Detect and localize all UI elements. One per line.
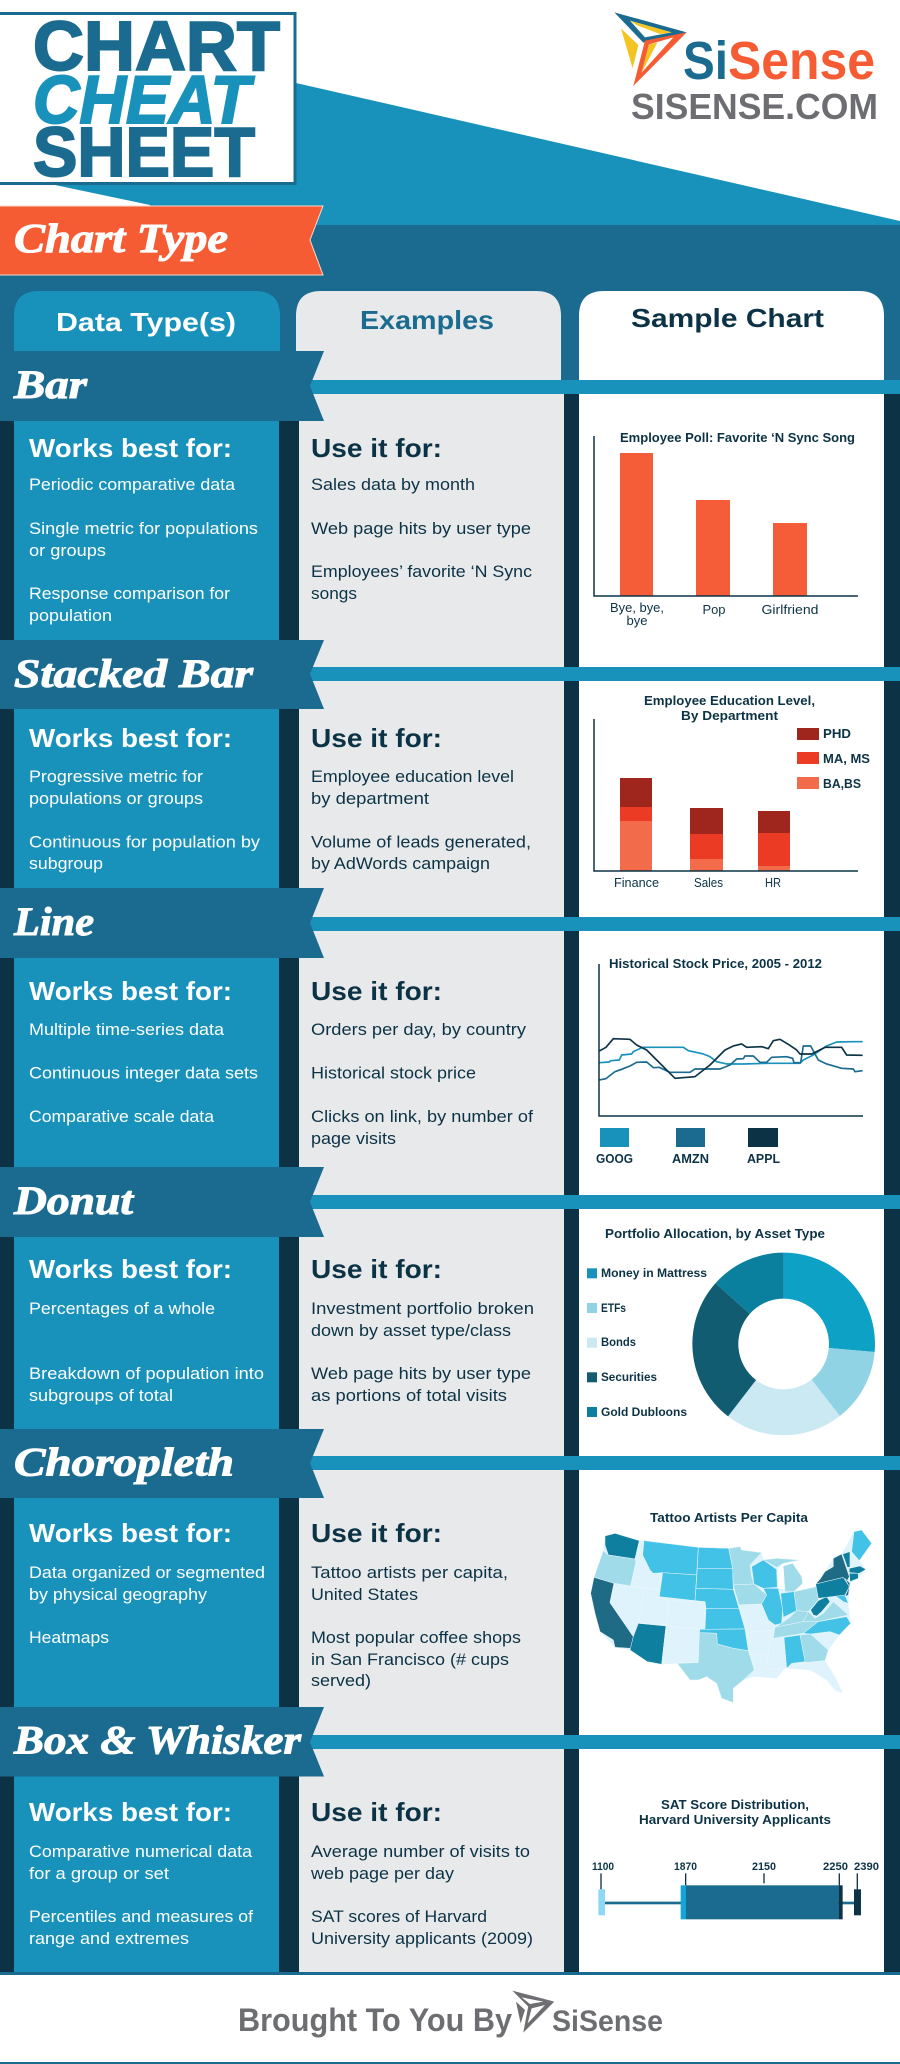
section: Bar <box>0 351 900 628</box>
text: bar use it for: Use it for: <box>311 433 442 463</box>
logo: SiSense: Si <box>683 31 728 91</box>
text: stacked bar use it for: Use it for: <box>311 723 442 753</box>
chart: box and whisker: 1100 <box>592 1861 614 1873</box>
chart: box and whisker: 2390 <box>854 1861 879 1873</box>
header band <box>0 225 900 381</box>
text: stacked bar works best for <box>29 723 261 873</box>
text: bar works best for <box>29 433 258 625</box>
chart: stacked bar: Employee Education Level, <box>644 694 815 708</box>
logo: SiSense: Sense <box>728 31 875 91</box>
ribbon: Donut: Donut <box>13 1178 135 1223</box>
text: stacked bar use it for: Employee education level <box>311 767 514 786</box>
ribbon: Choropleth <box>0 1429 324 1498</box>
text: choropleth use it for: in San Francisco (# cups <box>311 1650 509 1669</box>
text: stacked bar works best for: Progressive metric for <box>29 767 203 786</box>
chart: line: Historical Stock Price, 2005 - 2012 <box>609 957 822 971</box>
text: box works best for <box>29 1797 253 1948</box>
chart: bar: Pop <box>702 603 726 617</box>
title box: CHART <box>33 7 280 85</box>
text: stacked bar use it for: by department <box>311 789 429 808</box>
text: donut use it for: Use it for: <box>311 1254 442 1284</box>
text: box use it for <box>310 1797 533 1948</box>
ribbon: Line <box>0 888 324 958</box>
chart: box and whisker: 1870 <box>674 1861 697 1873</box>
text: bar use it for: Sales data by month <box>311 475 475 494</box>
chart: bar: bye <box>626 614 648 628</box>
text: stacked bar use it for: Volume of leads generated, <box>311 832 531 852</box>
panel: examples column <box>296 291 564 1972</box>
title box: CHEAT <box>33 62 255 138</box>
chart: donut: Securities <box>601 1370 657 1384</box>
chart: bar: Bye, bye, <box>610 601 664 615</box>
chart: bar: Girlfriend <box>762 603 819 617</box>
ribbon: Stacked Bar <box>0 640 324 709</box>
icon: SiSense mark <box>512 1991 554 2033</box>
header background wedge <box>55 83 900 226</box>
text: choropleth works best for <box>29 1518 265 1647</box>
text: box works best for: Comparative numerical data <box>29 1842 253 1861</box>
text: bar works best for: or groups <box>29 541 106 560</box>
chart: stacked bar: MA, MS <box>823 751 870 766</box>
text: donut use it for: Web page hits by user type <box>311 1364 531 1383</box>
text: bar works best for: Response comparison for <box>29 584 230 603</box>
chart: line: APPL <box>747 1151 780 1166</box>
text: choropleth works best for: Works best for: <box>29 1518 232 1548</box>
ribbon: Chart Type <box>0 206 323 275</box>
column heading: Examples: Examples <box>360 305 494 335</box>
text: line use it for <box>311 976 533 1148</box>
text: stacked bar works best for: Continuous for population by <box>29 832 261 852</box>
text: line works best for: Multiple time-series data <box>29 1020 225 1039</box>
text: donut works best for <box>29 1254 264 1405</box>
text: stacked bar works best for: subgroup <box>29 854 103 873</box>
text: box use it for: web page per day <box>310 1864 455 1883</box>
text: line works best for: Continuous integer data sets <box>29 1064 258 1083</box>
section: Choropleth <box>0 1429 900 1703</box>
chart: box and whisker: Harvard University Applicants <box>639 1813 831 1827</box>
title box <box>0 7 295 191</box>
text: bar works best for: Periodic comparative data <box>29 475 236 494</box>
text: bar use it for: Web page hits by user type <box>311 519 531 538</box>
text: donut works best for: Breakdown of population into <box>29 1364 264 1383</box>
footer: Brought To You By <box>238 2002 512 2038</box>
text: choropleth use it for: Tattoo artists per capita, <box>311 1563 508 1582</box>
text: box use it for: Use it for: <box>311 1797 442 1827</box>
text: line use it for: Use it for: <box>311 976 442 1006</box>
text: line use it for: page visits <box>311 1129 396 1148</box>
text: box works best for: Works best for: <box>29 1797 232 1827</box>
chart: box and whisker <box>592 1798 879 1919</box>
text: choropleth use it for <box>311 1518 521 1690</box>
panel: sample chart column <box>579 291 884 1972</box>
chart: donut: Gold Dubloons <box>601 1405 687 1419</box>
chart: choropleth map <box>591 1511 872 1703</box>
dark column background <box>0 393 900 1973</box>
chart: stacked bar <box>594 694 870 890</box>
text: box use it for: SAT scores of Harvard <box>311 1907 487 1926</box>
column heading: Sample Chart: Sample Chart <box>631 303 824 333</box>
ribbon: Bar <box>0 351 324 421</box>
text: bar use it for: songs <box>311 584 357 603</box>
text: stacked bar use it for <box>311 723 531 873</box>
ribbon: Choropleth: Choropleth <box>14 1440 234 1484</box>
text: line use it for: Clicks on link, by number of <box>311 1107 533 1126</box>
text: stacked bar works best for: populations or groups <box>29 789 203 808</box>
chart: choropleth map: Tattoo Artists Per Capita <box>650 1511 809 1525</box>
chart: box and whisker: 2250 <box>823 1861 848 1873</box>
text: line works best for: Works best for: <box>29 976 232 1006</box>
text: donut use it for: as portions of total visits <box>311 1386 507 1405</box>
chart: stacked bar: HR <box>765 876 781 890</box>
section: Box and Whisker <box>0 1707 900 1948</box>
section: Line <box>0 888 900 1166</box>
text: bar works best for: Works best for: <box>29 433 232 463</box>
text: stacked bar use it for: by AdWords campaign <box>311 854 490 873</box>
section: Donut <box>0 1167 900 1435</box>
text: bar use it for: Employees’ favorite ‘N Sync <box>311 562 533 581</box>
column heading: Data Type(s): Data Type(s) <box>56 307 236 337</box>
title box: SHEET <box>33 113 255 191</box>
chart: line: GOOG <box>596 1151 633 1166</box>
panel: data types column <box>14 291 280 1972</box>
text: line works best for <box>29 976 258 1126</box>
ribbon: Donut <box>0 1167 324 1237</box>
ribbon: Bar: Bar <box>13 362 88 407</box>
text: donut use it for: down by asset type/class <box>311 1321 511 1340</box>
text: line works best for: Comparative scale data <box>29 1107 215 1126</box>
section: Stacked Bar <box>0 640 900 890</box>
chart: donut: Bonds <box>601 1335 636 1349</box>
text: stacked bar works best for: Works best for: <box>29 723 232 753</box>
text: choropleth works best for: by physical geography <box>29 1585 208 1604</box>
ribbon: Box and Whisker <box>0 1707 324 1776</box>
chart: donut: ETFs <box>601 1301 626 1315</box>
chart: stacked bar: By Department <box>681 709 779 723</box>
chart: stacked bar: Sales <box>694 876 723 890</box>
text: donut works best for: Works best for: <box>29 1254 232 1284</box>
text: line use it for: Historical stock price <box>311 1064 476 1083</box>
chart: bar: Employee Poll: Favorite ‘N Sync Song <box>620 431 855 445</box>
text: bar works best for: population <box>29 606 112 625</box>
text: donut use it for <box>311 1254 534 1405</box>
footer <box>0 1972 900 2064</box>
chart: donut: Money in Mattress <box>601 1266 707 1280</box>
logo: SiSense <box>614 12 878 127</box>
logo: SiSense: SISENSE.COM <box>631 86 878 127</box>
text: donut works best for: Percentages of a whole <box>29 1299 215 1318</box>
ribbon: Box and Whisker: Box & Whisker <box>13 1718 301 1762</box>
text: box works best for: range and extremes <box>29 1929 189 1948</box>
footer: SiSense <box>552 2005 663 2038</box>
chart: stacked bar: PHD <box>823 726 851 741</box>
text: choropleth use it for: United States <box>311 1585 418 1604</box>
chart: box and whisker: SAT Score Distribution, <box>661 1798 809 1812</box>
chart: donut <box>587 1227 875 1435</box>
ribbon: Line: Line <box>13 899 94 944</box>
text: choropleth use it for: Use it for: <box>311 1518 442 1548</box>
chart: line <box>596 957 863 1166</box>
text: choropleth use it for: served) <box>311 1671 371 1690</box>
ribbon: Stacked Bar: Stacked Bar <box>14 651 254 696</box>
text: box works best for: Percentiles and measures of <box>29 1907 253 1926</box>
text: bar works best for: Single metric for populations <box>29 519 258 538</box>
text: choropleth works best for: Data organized or segmented <box>29 1563 265 1582</box>
chart: box and whisker: 2150 <box>752 1861 776 1873</box>
text: box use it for: Average number of visits to <box>311 1842 530 1861</box>
text: choropleth use it for: Most popular coffee shops <box>311 1628 521 1647</box>
chart: donut: Portfolio Allocation, by Asset Type <box>605 1227 825 1241</box>
text: choropleth works best for: Heatmaps <box>29 1628 109 1647</box>
ribbon: Chart Type: Chart Type <box>14 215 228 261</box>
text: bar use it for <box>311 433 533 603</box>
text: box works best for: for a group or set <box>29 1864 169 1883</box>
chart: line: AMZN <box>672 1151 709 1166</box>
chart: bar <box>594 431 858 628</box>
chart: stacked bar: BA,BS <box>823 776 861 791</box>
text: box use it for: University applicants (2009) <box>311 1929 533 1948</box>
text: donut use it for: Investment portfolio broken <box>311 1299 534 1318</box>
chart: stacked bar: Finance <box>614 876 659 890</box>
text: donut works best for: subgroups of total <box>29 1386 173 1405</box>
text: line use it for: Orders per day, by country <box>311 1020 527 1039</box>
